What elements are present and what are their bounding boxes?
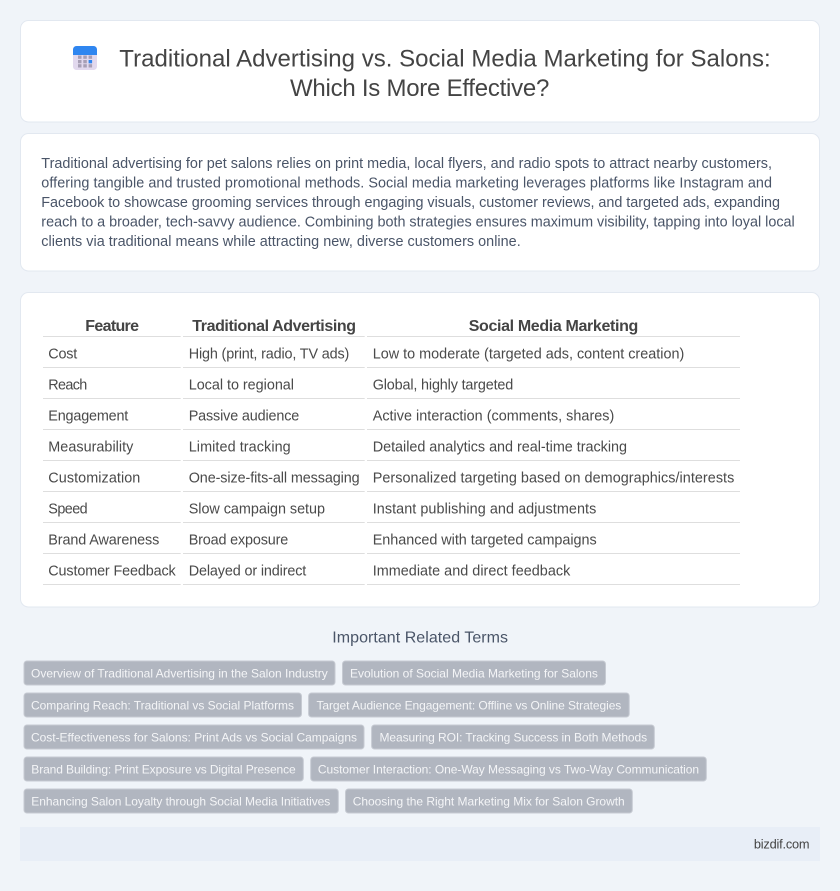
footer — [20, 827, 820, 861]
tag — [24, 789, 338, 813]
tag: Cost-Effectiveness for Salons: Print Ads vs Social Campaigns — [31, 730, 357, 744]
row: brand awareness: Enhanced with targeted campaigns — [373, 532, 597, 548]
title: Which Is More Effective? — [290, 75, 549, 102]
row: measurability: Measurability — [48, 439, 134, 455]
title: Traditional Advertising vs. Social Media Marketing for Salons: — [119, 46, 771, 73]
row: reach: Global, highly targeted — [373, 377, 513, 393]
row: engagement: Engagement — [48, 408, 128, 424]
tag — [24, 757, 303, 781]
row: engagement — [48, 408, 614, 424]
row: measurability: Limited tracking — [189, 439, 291, 455]
panel: comparison table — [20, 292, 820, 607]
panel: header — [20, 20, 820, 122]
tag — [24, 725, 364, 749]
row: cost: Cost — [48, 346, 77, 362]
tag: Customer Interaction: One-Way Messaging vs Two-Way Communication — [318, 762, 699, 776]
row: engagement: Passive audience — [189, 408, 299, 424]
row: customization — [48, 470, 734, 486]
tag: Choosing the Right Marketing Mix for Salon Growth — [353, 794, 625, 808]
tag — [342, 661, 606, 685]
tag — [24, 661, 335, 685]
panel: summary paragraph: reach to a broader, tech-savvy audience. Combining both strategies ensures maximum visibility, tapping into loyal local — [41, 214, 795, 230]
row: speed: Speed — [48, 501, 88, 517]
row: reach — [48, 377, 513, 393]
row: customer feedback: Immediate and direct feedback — [373, 563, 571, 579]
row: measurability: Detailed analytics and real-time tracking — [373, 439, 627, 455]
tag: Enhancing Salon Loyalty through Social Media Initiatives — [31, 794, 330, 808]
tag: Evolution of Social Media Marketing for Salons — [350, 666, 598, 680]
row: brand awareness — [48, 532, 597, 548]
row: cost: High (print, radio, TV ads) — [189, 346, 349, 362]
tag — [309, 693, 629, 717]
table header row: Feature — [85, 318, 139, 335]
row: reach: Reach — [48, 377, 87, 393]
panel: summary paragraph — [20, 134, 820, 271]
heading: related terms: Important Related Terms — [332, 630, 508, 647]
row: reach: Local to regional — [189, 377, 294, 393]
panel: summary paragraph: Facebook to showcase grooming services through engaging visuals, customer reviews, and targeted ads, expanding — [41, 195, 780, 211]
row: speed: Instant publishing and adjustments — [373, 501, 596, 517]
icon: calendar — [73, 46, 97, 70]
table header row: Social Media Marketing — [469, 318, 638, 335]
row: cost — [48, 346, 684, 362]
table header row — [85, 318, 638, 335]
tag — [311, 757, 706, 781]
tag: Target Audience Engagement: Offline vs Online Strategies — [316, 698, 621, 712]
panel: summary paragraph: clients via traditional means while attracting new, diverse customers online. — [41, 234, 521, 250]
row: customer feedback — [48, 563, 571, 579]
tag: Measuring ROI: Tracking Success in Both Methods — [380, 730, 647, 744]
row: customization: Customization — [48, 470, 140, 486]
footer: bizdif.com — [754, 836, 810, 851]
panel: summary paragraph: offering tangible and trusted promotional methods. Social media marketing leverages platforms like Instagram and — [41, 176, 772, 192]
row: measurability — [48, 439, 627, 455]
row: customization: Personalized targeting based on demographics/interests — [373, 470, 734, 486]
tag — [346, 789, 632, 813]
tag: Comparing Reach: Traditional vs Social Platforms — [31, 698, 294, 712]
title — [119, 46, 771, 102]
tag — [372, 725, 654, 749]
tag: Overview of Traditional Advertising in the Salon Industry — [31, 666, 328, 680]
tag — [24, 693, 302, 717]
row: brand awareness: Broad exposure — [189, 532, 288, 548]
row: engagement: Active interaction (comments, shares) — [373, 408, 614, 424]
panel: summary paragraph: Traditional advertising for pet salons relies on print media, local flyers, and radio spots to attract nearby customers, — [41, 156, 772, 172]
tag: Brand Building: Print Exposure vs Digital Presence — [31, 762, 296, 776]
row: customer feedback: Delayed or indirect — [189, 563, 306, 579]
panel: related term tags — [24, 661, 706, 813]
row: customer feedback: Customer Feedback — [48, 563, 176, 579]
row: cost: Low to moderate (targeted ads, content creation) — [373, 346, 684, 362]
row: customization: One-size-fits-all messaging — [189, 470, 360, 486]
row: brand awareness: Brand Awareness — [48, 532, 159, 548]
table header row: Traditional Advertising — [192, 318, 356, 335]
row: speed — [48, 501, 596, 517]
row: speed: Slow campaign setup — [189, 501, 325, 517]
